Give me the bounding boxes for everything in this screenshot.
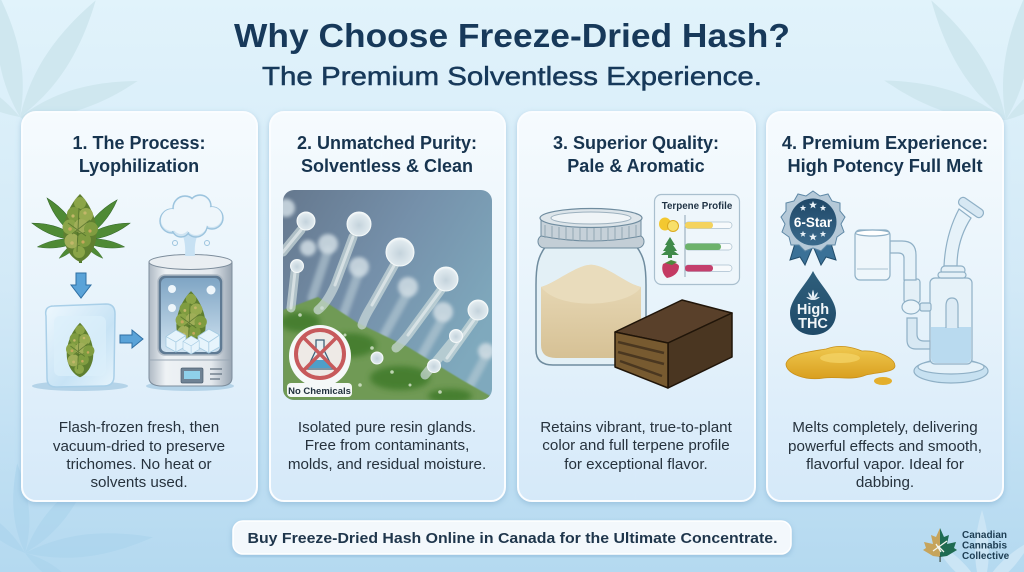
text: process description: trichomes. No heat or (66, 456, 212, 473)
icon: vapor cloud (160, 195, 223, 256)
photo: trichome macro (277, 190, 494, 403)
bar: pine (685, 244, 732, 250)
text: experience description: flavorful vapor. Ideal for (806, 456, 964, 473)
icon: pine tree (661, 237, 679, 258)
text: purity description: Isolated pure resin glands. (298, 419, 476, 436)
arrow: down (71, 273, 91, 298)
text: quality description: for exceptional flavor. (564, 456, 708, 473)
icon: six star badge (781, 191, 845, 265)
panel: purity (270, 112, 505, 501)
decorative leaf: top right (881, 0, 1024, 130)
heading: purity: Solventless & Clean (301, 156, 473, 176)
label: 6-star: 6-Star (794, 215, 833, 230)
text: purity description: molds, and residual moisture. (288, 456, 486, 473)
heading: quality (553, 133, 719, 176)
heading: experience (782, 133, 988, 176)
heading: purity (297, 133, 477, 176)
text: purity description: Free from contaminants, (305, 437, 469, 454)
heading: purity: 2. Unmatched Purity: (297, 133, 477, 153)
icon: high thc drop (790, 271, 836, 335)
label: high thc: High (797, 302, 829, 318)
text: logo name: Collective (962, 551, 1010, 562)
label: terpene profile: Terpene Profile (662, 201, 733, 212)
heading: quality: Pale & Aromatic (567, 156, 705, 176)
bar: berry (685, 265, 732, 272)
call to action banner: Buy Freeze-Dried Hash Online in Canada for the Ultimate Concentrate. (248, 531, 778, 547)
icon: frozen bud in ice (32, 304, 128, 391)
text: logo name: Canadian (962, 530, 1007, 541)
icon: dab rig (855, 196, 988, 383)
text: experience description: powerful effects and smooth, (788, 438, 982, 455)
text: experience description (788, 419, 982, 491)
icon: jar of powder (536, 208, 646, 365)
icon: maple leaf (923, 528, 957, 562)
icon: raspberry (662, 260, 679, 278)
panel: experience (767, 112, 1003, 501)
decorative leaf: bottom right (928, 510, 1024, 572)
icon: melted oil puddle (786, 346, 895, 385)
logo: canadian cannabis collective (923, 528, 1010, 562)
icon: lemon (659, 218, 678, 232)
icon: cannabis bud with leaves (30, 194, 132, 263)
label: no chemicals: No Chemicals (288, 386, 351, 397)
text: experience description: dabbing. (856, 474, 914, 491)
text: process description: Flash-frozen fresh, then (59, 419, 219, 436)
call to action banner (233, 521, 791, 554)
arrow: right (120, 330, 143, 348)
text: quality description: Retains vibrant, true-to-plant (540, 419, 733, 436)
label: high thc: THC (798, 316, 828, 332)
heading: the process (72, 133, 206, 176)
decorative leaf: top left (0, 0, 141, 141)
text: process description (53, 419, 225, 491)
text: experience description: Melts completely, delivering (792, 419, 978, 436)
icon: no chemicals badge (287, 325, 352, 397)
panel: quality (518, 112, 755, 501)
text: process description: vacuum-dried to preserve (53, 438, 225, 455)
text: logo name: Cannabis (962, 540, 1007, 552)
icon: hash brick (615, 300, 732, 388)
heading: experience: 4. Premium Experience: (782, 133, 988, 153)
heading: quality: 3. Superior Quality: (553, 133, 719, 153)
subtitle: The Premium Solventless Experience. (262, 61, 762, 91)
icon: freeze dryer (146, 254, 234, 391)
panel: the process (22, 112, 257, 501)
text: logo name (962, 530, 1010, 562)
title: Why Choose Freeze-Dried Hash? (234, 17, 790, 54)
text: quality description (540, 419, 733, 473)
heading: the process: 1. The Process: (72, 133, 206, 153)
text: quality description: color and full terpene profile (542, 437, 730, 454)
bar: lemon (685, 222, 732, 228)
heading: the process: Lyophilization (79, 156, 199, 176)
heading: experience: High Potency Full Melt (787, 156, 983, 176)
text: process description: solvents used. (90, 474, 188, 491)
text: purity description (288, 419, 486, 473)
label: high thc (797, 302, 829, 332)
card: terpene profile (654, 194, 740, 284)
decorative leaf: bottom left (0, 463, 154, 572)
